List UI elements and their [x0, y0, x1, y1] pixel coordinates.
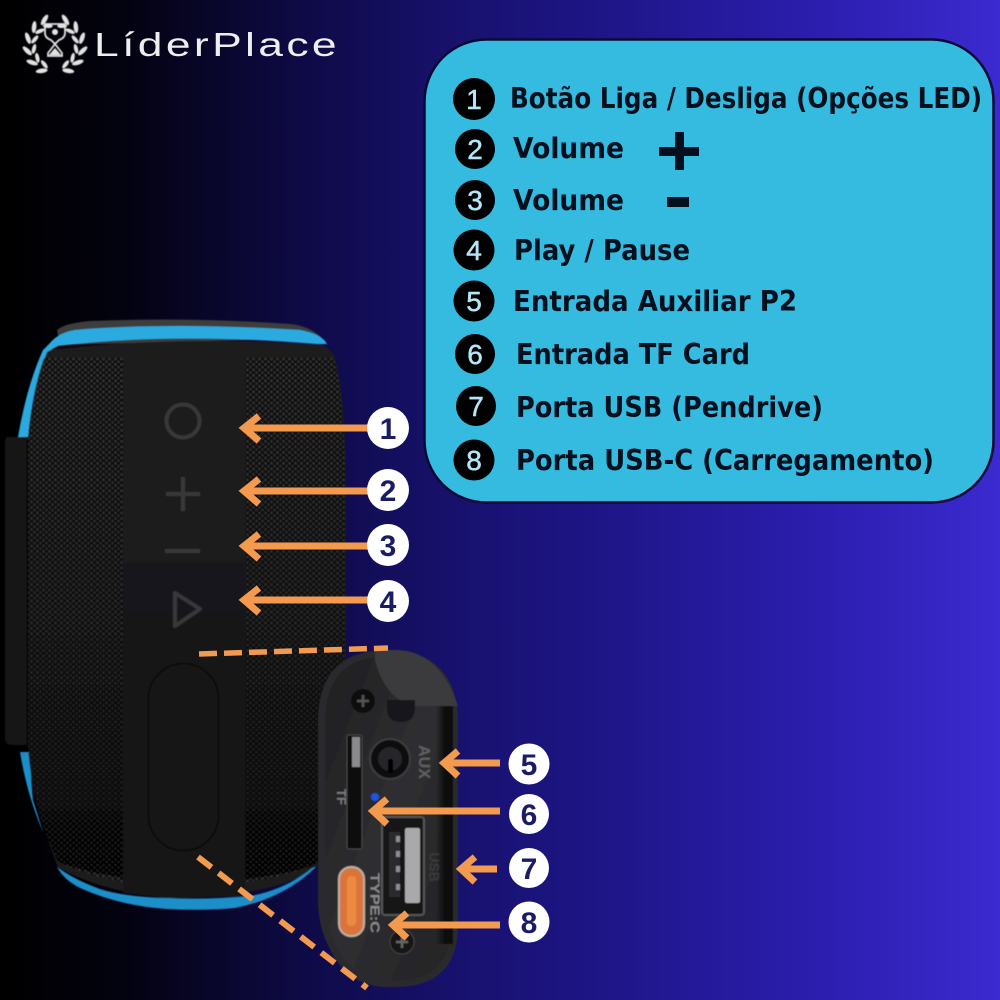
panel background	[424, 40, 994, 502]
number 3: 3	[380, 530, 396, 563]
arrow 1	[244, 416, 370, 441]
icon: plus	[659, 132, 699, 170]
center strap	[123, 354, 245, 898]
legend item 8	[454, 440, 934, 480]
legend item 5	[454, 280, 797, 322]
arrows: ports	[373, 751, 500, 938]
legend item 7	[456, 386, 823, 426]
port cover	[148, 664, 218, 850]
legend item 7: 7	[468, 391, 484, 422]
legend item 8: 8	[466, 445, 482, 476]
TF label: TF	[334, 789, 349, 805]
body	[28, 341, 346, 898]
number 7: 7	[521, 853, 537, 886]
legend item 2	[455, 129, 624, 169]
TF card slot	[347, 735, 362, 849]
left lower blue rim	[20, 752, 43, 832]
legend item 6	[455, 334, 750, 374]
bottom blue rim	[57, 867, 316, 910]
arrow 5	[444, 751, 500, 776]
number 7	[509, 848, 549, 888]
legend item 1	[453, 78, 982, 120]
number 2: 2	[380, 475, 396, 508]
arrow 4	[244, 588, 370, 613]
button: plus	[166, 477, 200, 511]
callout numbers: buttons	[367, 407, 409, 622]
brand name: LíderPlace	[94, 26, 340, 63]
LED	[371, 793, 379, 801]
legend item 2: 2	[467, 134, 483, 165]
rubber flap	[375, 650, 458, 706]
number 1: 1	[380, 413, 396, 446]
AUX label: AUX	[415, 745, 432, 779]
callout numbers: ports	[508, 744, 550, 942]
fabric shading	[28, 358, 345, 884]
number 3	[367, 524, 409, 566]
legend item 6: 6	[467, 339, 483, 370]
legend item 3: 3	[467, 185, 483, 216]
legend item 5: Entrada Auxiliar P2	[513, 285, 797, 318]
number 6: 6	[521, 799, 537, 832]
number 5: 5	[521, 749, 537, 782]
number 8: 8	[521, 907, 537, 940]
legend item 4: 4	[466, 235, 482, 266]
USB label: USB	[426, 852, 442, 882]
arrow 2	[244, 479, 370, 504]
flap hinge	[387, 700, 415, 722]
arrow 7	[461, 857, 497, 882]
legend item 3: Volume	[513, 184, 624, 217]
icon: minus	[667, 197, 689, 207]
legend item 4	[454, 230, 690, 270]
speaker	[5, 320, 346, 910]
panel: legend	[424, 40, 994, 502]
bottom screw	[390, 930, 414, 954]
top blue rim	[18, 326, 327, 437]
legend item 5: 5	[466, 286, 482, 317]
right inner shadow	[436, 706, 453, 944]
left fabric grille	[28, 358, 123, 882]
panel body	[318, 650, 458, 987]
number 4: 4	[380, 586, 397, 619]
legend item 1: 1	[466, 84, 482, 115]
arrow 8	[393, 913, 500, 938]
arrows: buttons	[244, 416, 370, 613]
legend item 7: Porta USB (Pendrive)	[516, 391, 823, 424]
logo	[21, 12, 340, 78]
number 6	[509, 794, 549, 834]
button: power	[166, 404, 200, 438]
dashed line: bottom	[198, 857, 367, 988]
side strap	[5, 437, 27, 745]
number 2	[367, 469, 409, 511]
panel inner plate	[325, 656, 451, 981]
number 4	[367, 580, 409, 622]
right fabric grille	[245, 358, 345, 882]
TYPE-C label: TYPE:C	[368, 873, 383, 934]
legend item 4: Play / Pause	[514, 234, 690, 267]
legend item 6: Entrada TF Card	[516, 338, 750, 371]
top cap	[57, 320, 322, 345]
number 5	[508, 744, 550, 784]
legend item 3	[455, 180, 624, 220]
port panel	[318, 650, 458, 987]
number 1	[367, 407, 409, 449]
button: play	[175, 593, 200, 626]
arrow 6	[373, 799, 500, 824]
USB port	[382, 817, 424, 915]
dashed line: top	[199, 648, 388, 654]
icon: laurel wreath with trophy	[21, 12, 89, 78]
top screw	[351, 689, 375, 713]
USB-C port	[339, 867, 364, 936]
number 8	[508, 902, 550, 942]
aux jack	[370, 739, 410, 779]
button: minus	[165, 549, 200, 553]
arrow 3	[244, 534, 370, 559]
legend item 2: Volume	[513, 132, 624, 165]
legend item 8: Porta USB-C (Carregamento)	[516, 444, 934, 477]
